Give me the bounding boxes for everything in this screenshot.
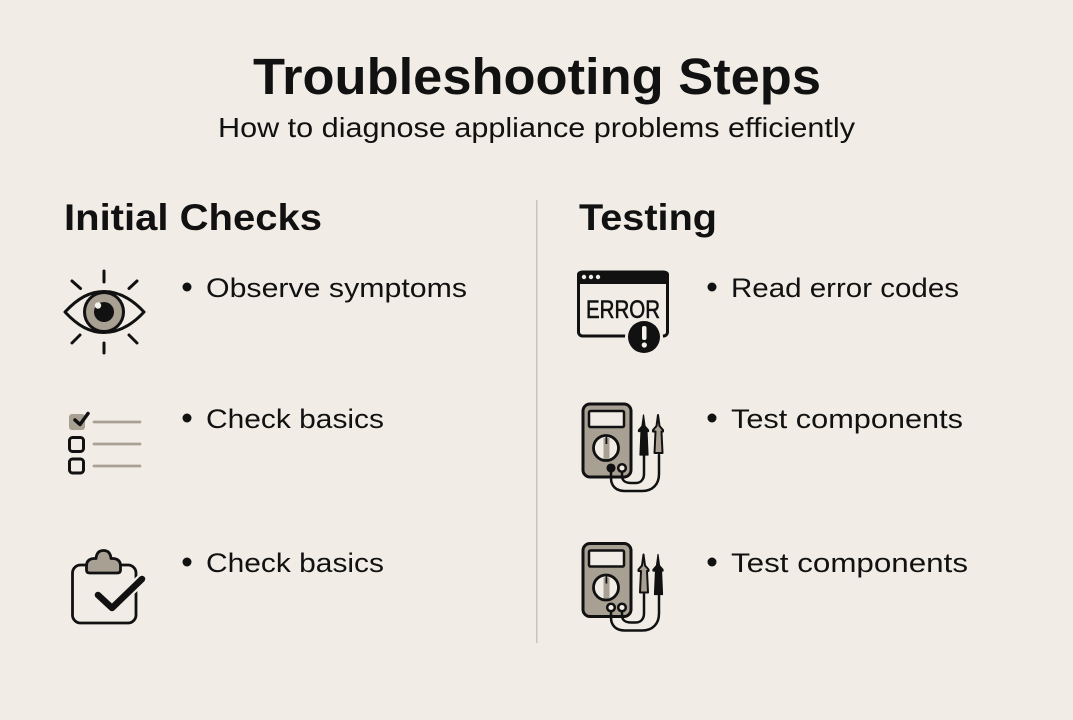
heading: initial checks: Initial Checks <box>64 197 322 238</box>
bullet text: check basics: Check basics <box>206 404 384 434</box>
title: Troubleshooting Steps <box>253 48 821 105</box>
icon: multimeter <box>583 544 663 630</box>
icon: error window: ERROR <box>586 296 660 324</box>
bullet text: observe symptoms: Observe symptoms <box>206 273 467 303</box>
bullet text: check basics: Check basics <box>206 548 384 578</box>
icon: multimeter <box>583 404 663 491</box>
panel: testing <box>577 197 968 630</box>
icon: eye <box>65 271 144 353</box>
panel: initial checks <box>64 197 467 623</box>
bullet text: test components: Test components <box>731 548 968 578</box>
bullet text: read error codes: Read error codes <box>731 273 959 303</box>
icon: checklist <box>69 414 140 473</box>
heading: testing: Testing <box>579 197 717 238</box>
subtitle: How to diagnose appliance problems efficiently <box>218 112 855 143</box>
bullet text: test components: Test components <box>731 404 963 434</box>
icon: clipboard with check <box>72 550 142 623</box>
icon: error window <box>577 271 669 356</box>
